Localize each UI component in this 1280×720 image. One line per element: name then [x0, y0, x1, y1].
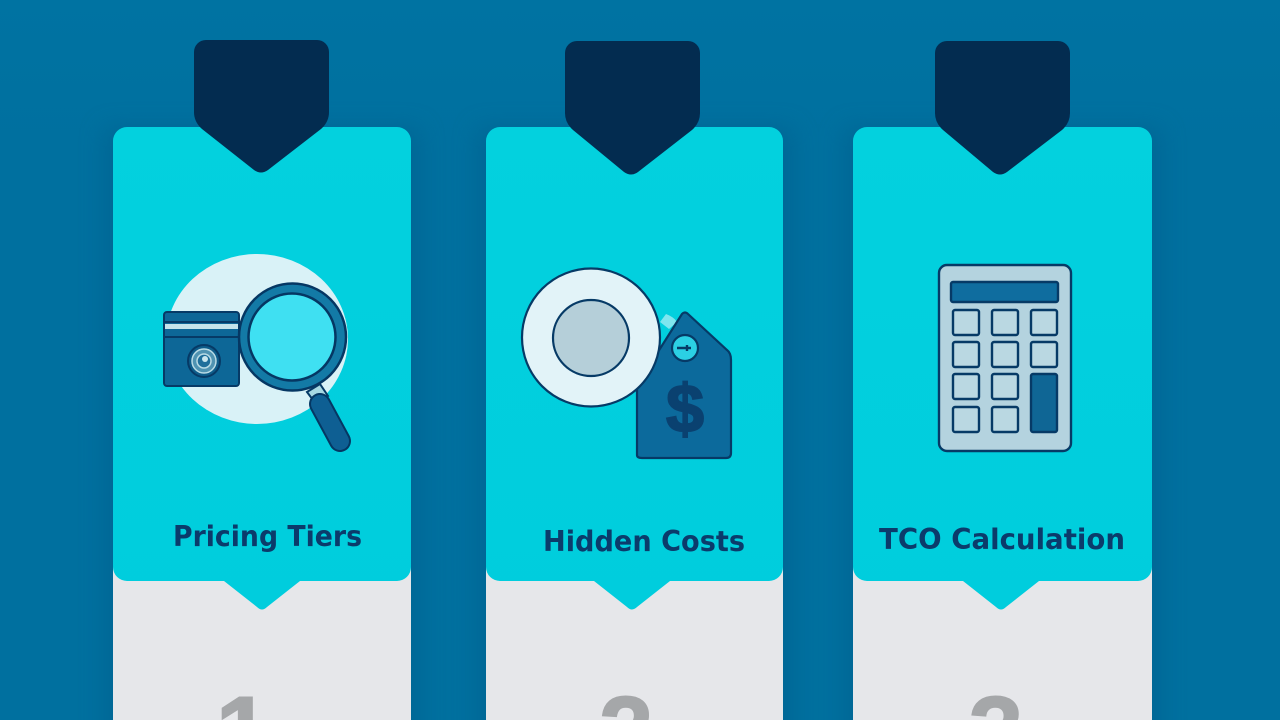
card body 3	[853, 127, 1152, 610]
tab 2	[565, 41, 700, 174]
tab 1	[194, 40, 329, 172]
number panel 3	[853, 550, 1152, 720]
card body 2	[486, 127, 783, 610]
icon: card under magnifying glass	[164, 254, 348, 441]
card body 1	[113, 127, 411, 610]
heading: TCO calculation: TCO Calculation	[879, 523, 1125, 556]
heading: hidden costs: Hidden Costs	[543, 525, 745, 558]
number panel 2	[486, 550, 783, 720]
icon: price tag with disc: $	[666, 371, 704, 447]
tab 3	[935, 41, 1070, 174]
number panel 1	[113, 550, 411, 720]
icon: price tag with disc	[522, 268, 731, 458]
panel: hidden costs	[486, 41, 783, 720]
panel: pricing tiers	[113, 40, 411, 720]
panel: TCO calculation	[853, 41, 1152, 720]
heading: pricing tiers: Pricing Tiers	[173, 520, 362, 553]
icon: calculator	[939, 265, 1071, 451]
magnifying glass	[239, 284, 346, 441]
